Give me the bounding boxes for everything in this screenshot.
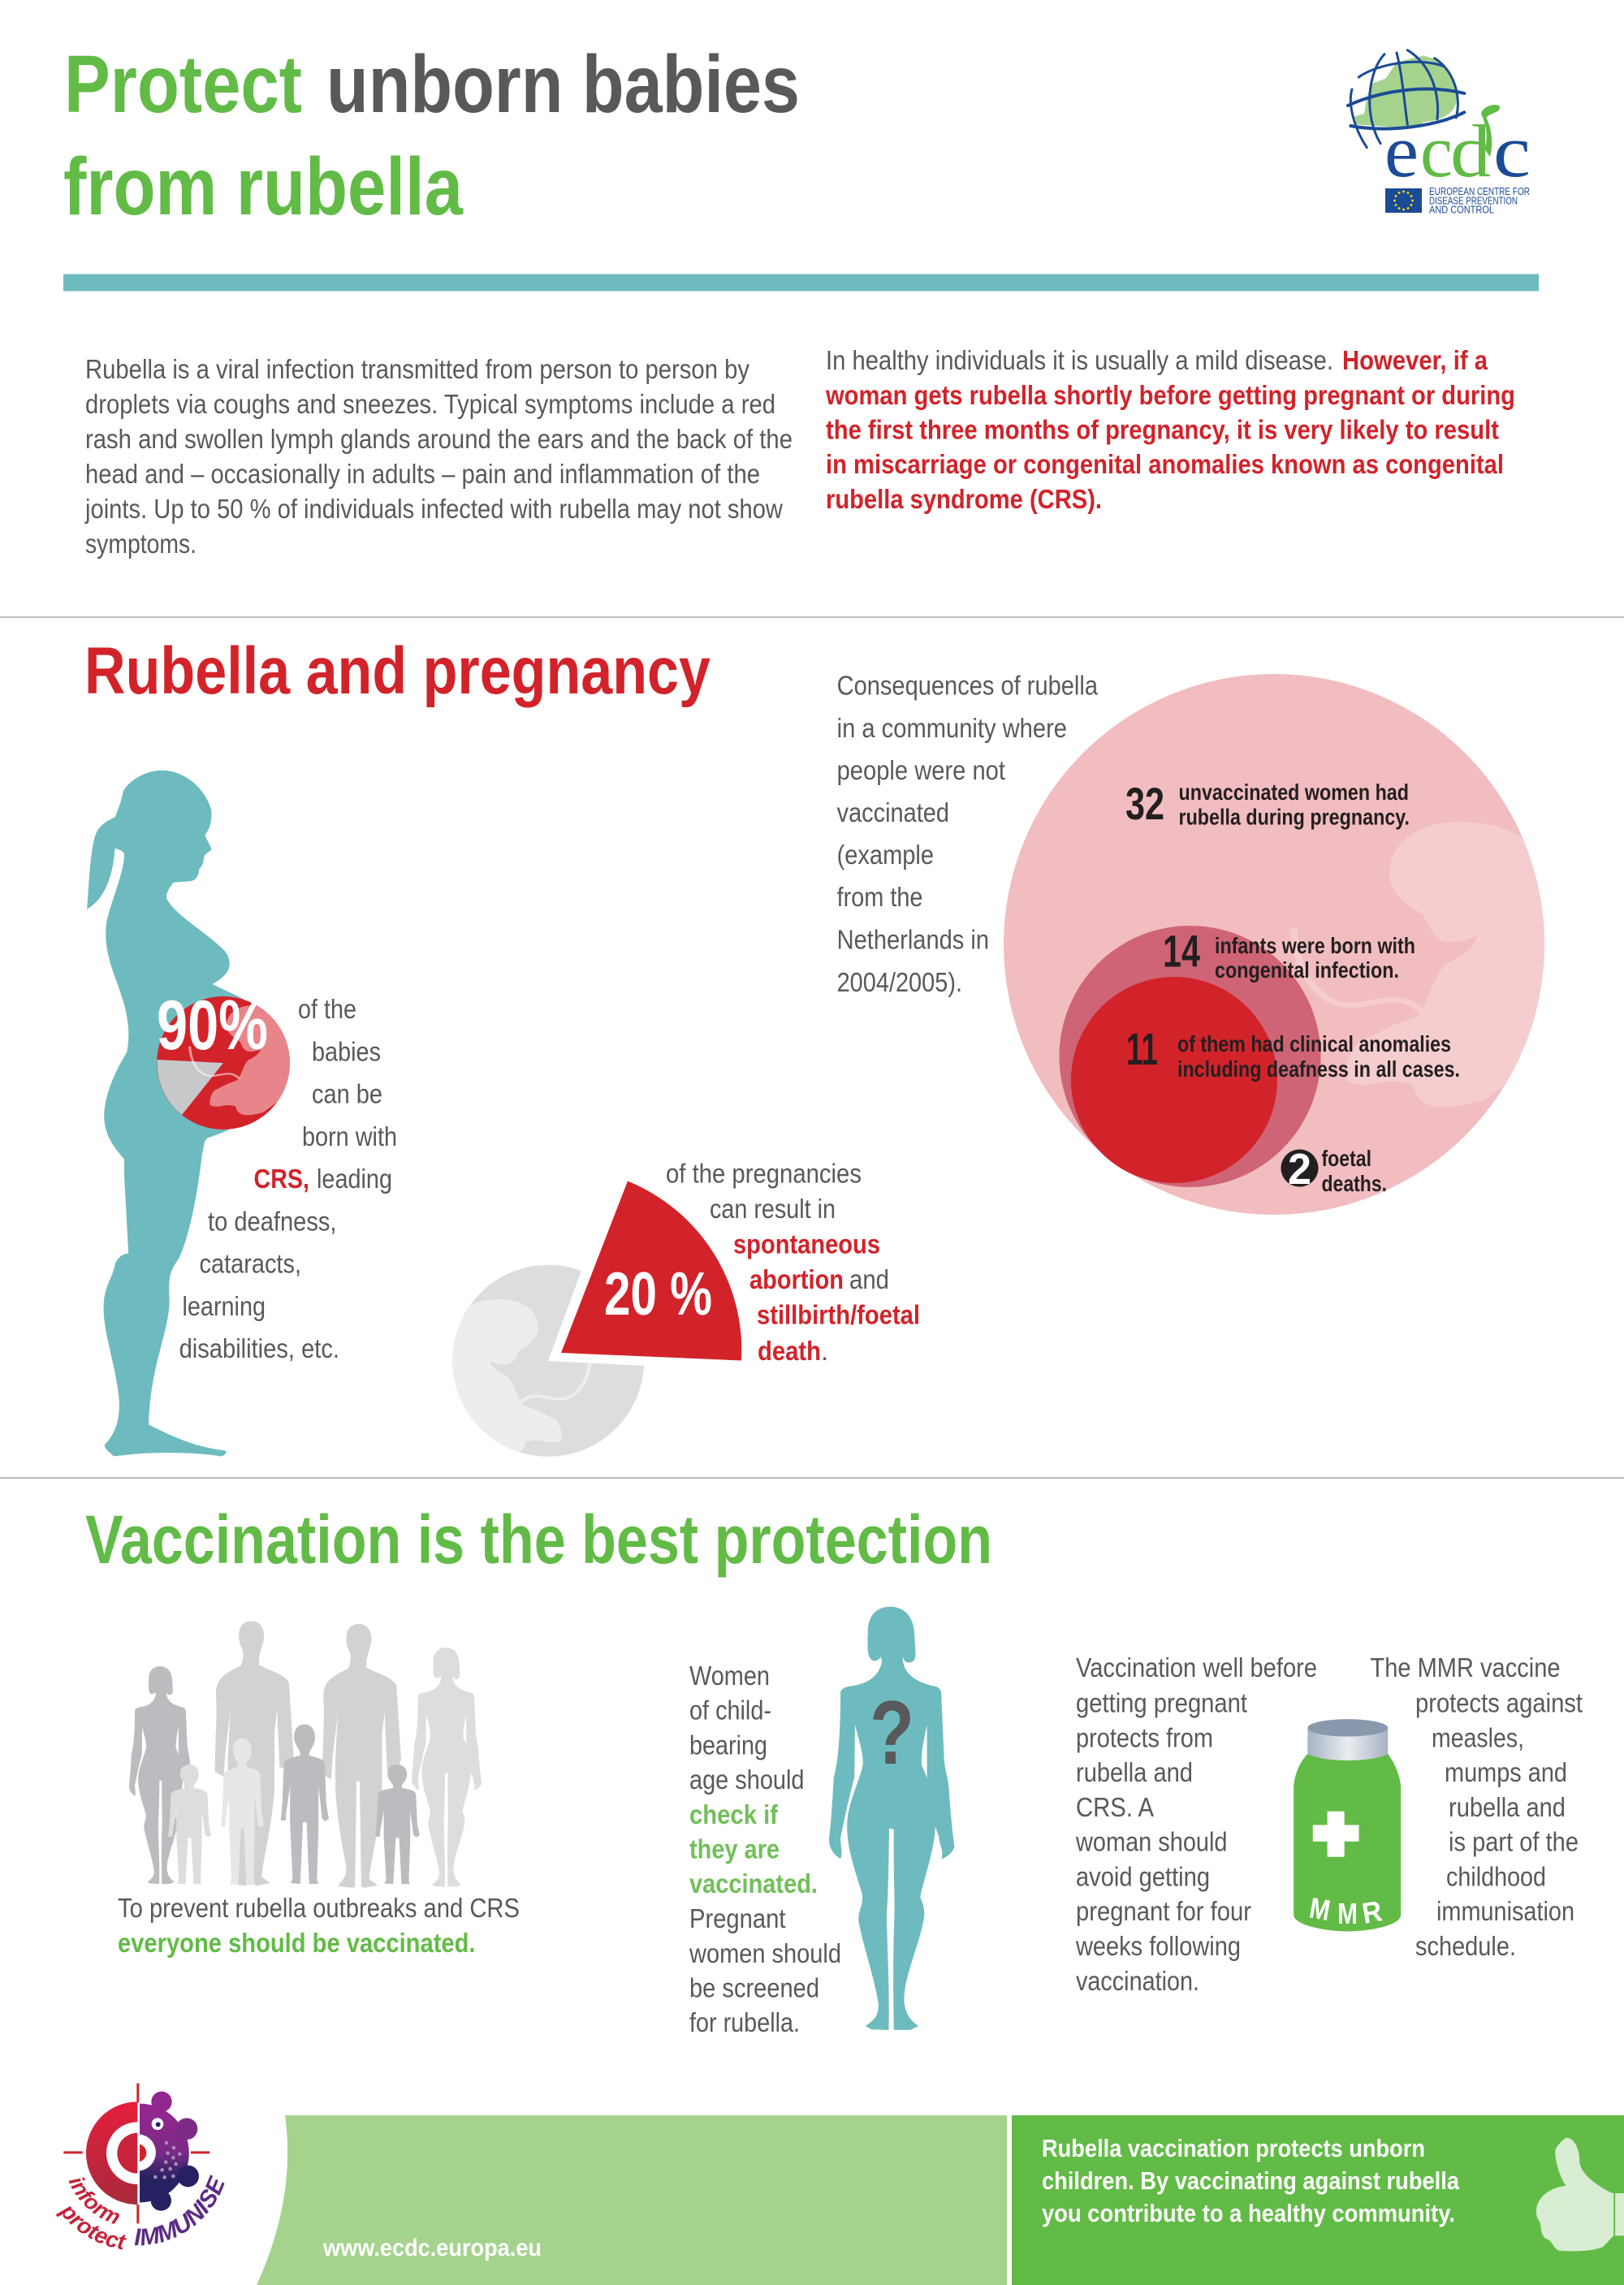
text block: introduction right: the first three months of pregnancy, it is very likely to result [826, 414, 1499, 445]
text block: women of child-bearing age: bearing [689, 1730, 767, 1760]
text block: women of child-bearing age: age should [689, 1765, 804, 1795]
text block: 90 percent caption: leading [317, 1164, 392, 1194]
text block: introduction left: symptoms. [85, 529, 197, 559]
icon: woman with question mark [829, 1607, 954, 2030]
text block: consequences: 2004/2005). [837, 967, 962, 997]
text block: vaccination well before: Vaccination well before [1076, 1652, 1317, 1682]
footer panel: key message [1012, 2115, 1624, 2285]
text block: introduction left [84, 354, 793, 559]
text block: vaccination well before: avoid getting [1076, 1861, 1210, 1892]
chart: nested circles of rubella consequences: unvaccinated women had [1179, 780, 1409, 805]
text block: women of child-bearing age [689, 1661, 841, 2037]
logo: inform protect immunise: inform [68, 2178, 119, 2224]
icon: family silhouettes [129, 1621, 482, 1888]
text block: MMR vaccine: The MMR vaccine [1371, 1652, 1561, 1682]
chart: nested circles of rubella consequences: rubella during pregnancy. [1179, 804, 1410, 829]
text block: consequences: (example [837, 840, 934, 870]
text block: MMR vaccine: childhood [1446, 1861, 1546, 1892]
text block: women of child-bearing age: check if [689, 1799, 779, 1829]
text block: prevent outbreaks [118, 1893, 520, 1958]
text block: vaccination well before: vaccination. [1076, 1966, 1199, 1996]
footer panel: key message: you contribute to a healthy community. [1042, 2199, 1455, 2227]
chart: 90 percent pie on belly [157, 996, 290, 1130]
icon: MMR vaccine bottle: M [1337, 1897, 1358, 1930]
text block: women of child-bearing age: vaccinated. [689, 1868, 818, 1898]
text block: 90 percent caption: learning [182, 1291, 266, 1321]
logo: ECDC [1348, 50, 1531, 216]
chart: nested circles of rubella consequences [1004, 674, 1589, 1215]
title [63, 39, 800, 232]
text block: 90 percent caption: can be [312, 1079, 382, 1109]
logo: ECDC: DISEASE PREVENTION [1429, 195, 1518, 207]
heading: Vaccination is the best protection: Vaccination is the best protection [85, 1501, 992, 1578]
text block: MMR vaccine: protects against [1415, 1688, 1583, 1718]
icon: MMR vaccine bottle [1294, 1719, 1401, 1932]
footer panel: key message: children. By vaccinating against rubella [1042, 2166, 1460, 2195]
chart: 90 percent pie on belly: 90% [157, 987, 268, 1065]
text block: vaccination well before: protects from [1076, 1722, 1213, 1752]
logo: inform protect immunise [55, 2084, 224, 2249]
text block: introduction right: rubella syndrome (CRS). [826, 484, 1102, 514]
text block: 90 percent caption: disabilities, etc. [179, 1333, 339, 1363]
text block: introduction right: woman gets rubella shortly before getting pregnant or during [825, 380, 1515, 410]
chart: nested circles of rubella consequences: 32 [1125, 778, 1164, 829]
text block: MMR vaccine: immunisation [1436, 1896, 1574, 1926]
chart: 20 percent wedge with grey embryo circle [430, 1181, 741, 1457]
text block: consequences: Consequences of rubella [837, 671, 1099, 701]
text block: 20 percent caption: spontaneous [733, 1229, 880, 1259]
logo: inform protect immunise: IMMUNISE [135, 2175, 224, 2246]
title: from rubella [63, 141, 464, 232]
heading: Rubella and pregnancy: Rubella and pregnancy [84, 634, 710, 708]
footer panel: website [257, 2115, 1007, 2285]
icon: pregnant woman silhouette [87, 771, 270, 1456]
text block: 90 percent caption [179, 994, 397, 1363]
text block: 20 percent caption: of the pregnancies [666, 1158, 862, 1189]
text block: vaccination well before: CRS. A [1076, 1792, 1154, 1822]
title: Protect [64, 39, 302, 130]
text block: introduction left: Rubella is a viral infection transmitted from person to person by [85, 354, 749, 384]
text block: consequences: from the [837, 882, 922, 912]
text block: vaccination well before: weeks following [1075, 1931, 1241, 1961]
text block: introduction left: droplets via coughs and sneezes. Typical symptoms include a red [85, 389, 775, 419]
text block: 90 percent caption: babies [312, 1036, 381, 1067]
text block: introduction right: in miscarriage or congenital anomalies known as congenital [826, 449, 1504, 479]
text block: consequences [837, 671, 1099, 997]
text block: vaccination well before: getting pregnant [1076, 1688, 1247, 1718]
icon: thumbs up [1536, 2138, 1624, 2251]
text block: prevent outbreaks: everyone should be vaccinated. [118, 1928, 476, 1958]
text block: MMR vaccine: mumps and [1445, 1757, 1567, 1787]
text block: 20 percent caption: can result in [710, 1194, 836, 1224]
text block: vaccination well before: pregnant for four [1076, 1896, 1251, 1926]
icon: MMR vaccine bottle: M [1307, 1891, 1332, 1927]
chart: nested circles of rubella consequences: infants were born with [1215, 933, 1415, 958]
text block: women of child-bearing age: women should [689, 1938, 841, 1968]
text block: MMR vaccine [1371, 1652, 1583, 1961]
chart: nested circles of rubella consequences: deaths. [1322, 1171, 1387, 1196]
text block: 20 percent caption: death [758, 1336, 821, 1366]
text block: introduction right [825, 345, 1515, 514]
text block: women of child-bearing age: of child- [689, 1695, 771, 1726]
text block: introduction left: rash and swollen lymph glands around the ears and the back of the [85, 424, 793, 454]
text block: introduction right: In healthy individuals it is usually a mild disease. [826, 345, 1333, 375]
text block: women of child-bearing age: they are [689, 1834, 780, 1864]
chart: nested circles of rubella consequences: 11 [1126, 1023, 1158, 1074]
chart: nested circles of rubella consequences: of them had clinical anomalies [1177, 1031, 1451, 1056]
text block: women of child-bearing age: for rubella. [689, 2007, 800, 2037]
text block: 20 percent caption: abortion [749, 1264, 844, 1294]
text block: prevent outbreaks: To prevent rubella outbreaks and CRS [118, 1893, 520, 1923]
logo: ECDC: e [1384, 110, 1419, 192]
text block: introduction left: joints. Up to 50 % of individuals infected with rubella may not show [84, 494, 783, 524]
text block: consequences: Netherlands in [837, 924, 989, 955]
text block: women of child-bearing age: be screened [689, 1973, 819, 2002]
chart: nested circles of rubella consequences: including deafness in all cases. [1177, 1056, 1460, 1082]
logo: ECDC: EUROPEAN CENTRE FOR [1429, 185, 1530, 197]
text block: consequences: vaccinated [837, 797, 949, 827]
chart: nested circles of rubella consequences: foetal [1322, 1146, 1371, 1171]
text block: 20 percent caption: stillbirth/foetal [757, 1300, 920, 1330]
icon: woman with question mark: ? [870, 1682, 914, 1783]
text block: 90 percent caption: of the [298, 994, 356, 1024]
logo: ECDC: c [1420, 110, 1453, 192]
text block: 20 percent caption: . [821, 1336, 828, 1366]
chart: nested circles of rubella consequences: 2 [1288, 1145, 1311, 1194]
text block: 20 percent caption: and [849, 1264, 889, 1294]
icon: MMR vaccine bottle: R [1359, 1894, 1384, 1930]
chart: 20 percent wedge with grey embryo circle: 20 % [604, 1259, 712, 1328]
chart: nested circles of rubella consequences: congenital infection. [1215, 957, 1399, 983]
text block: consequences: in a community where [837, 713, 1067, 743]
text block: consequences: people were not [837, 755, 1005, 785]
logo: ECDC: c [1493, 110, 1531, 192]
text block: introduction left: head and – occasionally in adults – pain and inflammation of the [85, 459, 760, 489]
title: unborn babies [326, 39, 800, 130]
text block: vaccination well before: woman should [1075, 1827, 1228, 1857]
text block: 90 percent caption: born with [302, 1121, 397, 1151]
footer panel: key message: Rubella vaccination protects unborn [1042, 2134, 1425, 2162]
text block: women of child-bearing age: Women [689, 1661, 770, 1691]
text block: introduction right: However, if a [1342, 345, 1488, 375]
text block: vaccination well before: rubella and [1076, 1757, 1193, 1787]
text block: MMR vaccine: is part of the [1449, 1827, 1579, 1857]
logo: ECDC: AND CONTROL [1429, 204, 1494, 216]
text block: MMR vaccine: measles, [1432, 1722, 1524, 1752]
text block: 90 percent caption: cataracts, [200, 1249, 301, 1279]
text block: 90 percent caption: to deafness, [208, 1206, 336, 1236]
logo: ECDC: d [1450, 110, 1491, 192]
text block: 20 percent caption [666, 1158, 920, 1366]
text block: vaccination well before [1075, 1652, 1317, 1996]
text block: MMR vaccine: schedule. [1415, 1931, 1516, 1961]
footer panel: website: www.ecdc.europa.eu [322, 2235, 542, 2261]
logo: inform protect immunise: protect [55, 2205, 127, 2249]
text block: MMR vaccine: rubella and [1449, 1792, 1566, 1822]
text block: women of child-bearing age: Pregnant [689, 1903, 786, 1933]
text block: 90 percent caption: CRS, [253, 1164, 309, 1194]
chart: nested circles of rubella consequences: 14 [1163, 926, 1200, 976]
